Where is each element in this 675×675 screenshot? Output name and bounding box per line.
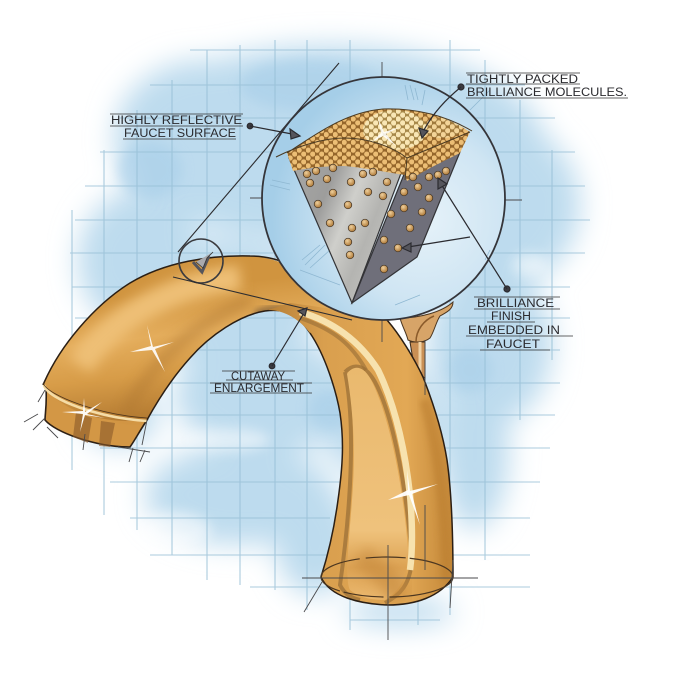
label: brilliance finish embedded in faucet [466, 297, 573, 351]
spout nozzle [45, 388, 147, 447]
small magnifier circle with notch [179, 239, 223, 283]
spout cream ring [44, 385, 147, 421]
cream reflection strip [300, 312, 412, 570]
lens hatch strokes [270, 85, 490, 305]
label: cutaway enlargement [210, 371, 312, 395]
leader lines from notch to lens [173, 63, 352, 320]
sparkle: spout upper [130, 325, 174, 372]
arrow: brilliance finish [402, 178, 510, 292]
arrow: reflective surface [247, 123, 300, 139]
honeycomb bright patch [363, 110, 462, 150]
base ellipse [321, 557, 453, 597]
arrow: molecules [419, 84, 464, 138]
label: brilliance finish embedded in faucet: FINISH [491, 311, 531, 323]
label: highly reflective faucet surface: HIGHLY REFLECTIVE [111, 115, 242, 127]
label: tightly packed brilliance molecules [466, 73, 628, 99]
highlight panel [347, 368, 408, 600]
faucet spout [42, 255, 332, 448]
label: tightly packed brilliance molecules: BRILLIANCE MOLECULES. [467, 87, 627, 99]
honeycomb top surface [287, 109, 470, 158]
left metal face [289, 158, 406, 303]
watercolor blue wash [78, 45, 580, 626]
label: brilliance finish embedded in faucet: BRILLIANCE [477, 298, 554, 310]
faucet body [268, 303, 453, 605]
construction crosshair lines [24, 62, 522, 640]
label: highly reflective faucet surface: FAUCET SURFACE [124, 128, 236, 140]
dark inner contour [340, 367, 412, 603]
label: brilliance finish embedded in faucet: FAUCET [486, 339, 540, 351]
spout body [43, 256, 387, 421]
sparkles [62, 325, 438, 525]
right metal face [352, 152, 460, 303]
honeycomb right band [405, 132, 470, 181]
lens sparkle on honeycomb [372, 118, 400, 146]
enlargement lens [262, 77, 505, 320]
label: cutaway enlargement: CUTAWAY [231, 371, 285, 383]
embedded molecules [303, 164, 450, 273]
arrow: cutaway [269, 308, 307, 369]
body outline [310, 320, 453, 605]
label: cutaway enlargement: ENLARGEMENT [214, 383, 304, 395]
spout outlines [43, 256, 310, 420]
faucet rear handle [400, 302, 453, 378]
arrows [247, 84, 510, 369]
sparkle: spout lower [62, 398, 105, 432]
label: highly reflective faucet surface [110, 114, 243, 140]
label: tightly packed brilliance molecules: TIGHTLY PACKED [467, 74, 578, 86]
blueprint grid [70, 40, 590, 630]
sparkle: body [388, 470, 438, 525]
cutaway wedge [276, 109, 472, 303]
wedge top edge [276, 109, 472, 180]
label: brilliance finish embedded in faucet: EMBEDDED IN [468, 325, 560, 337]
honeycomb left band [287, 138, 407, 175]
